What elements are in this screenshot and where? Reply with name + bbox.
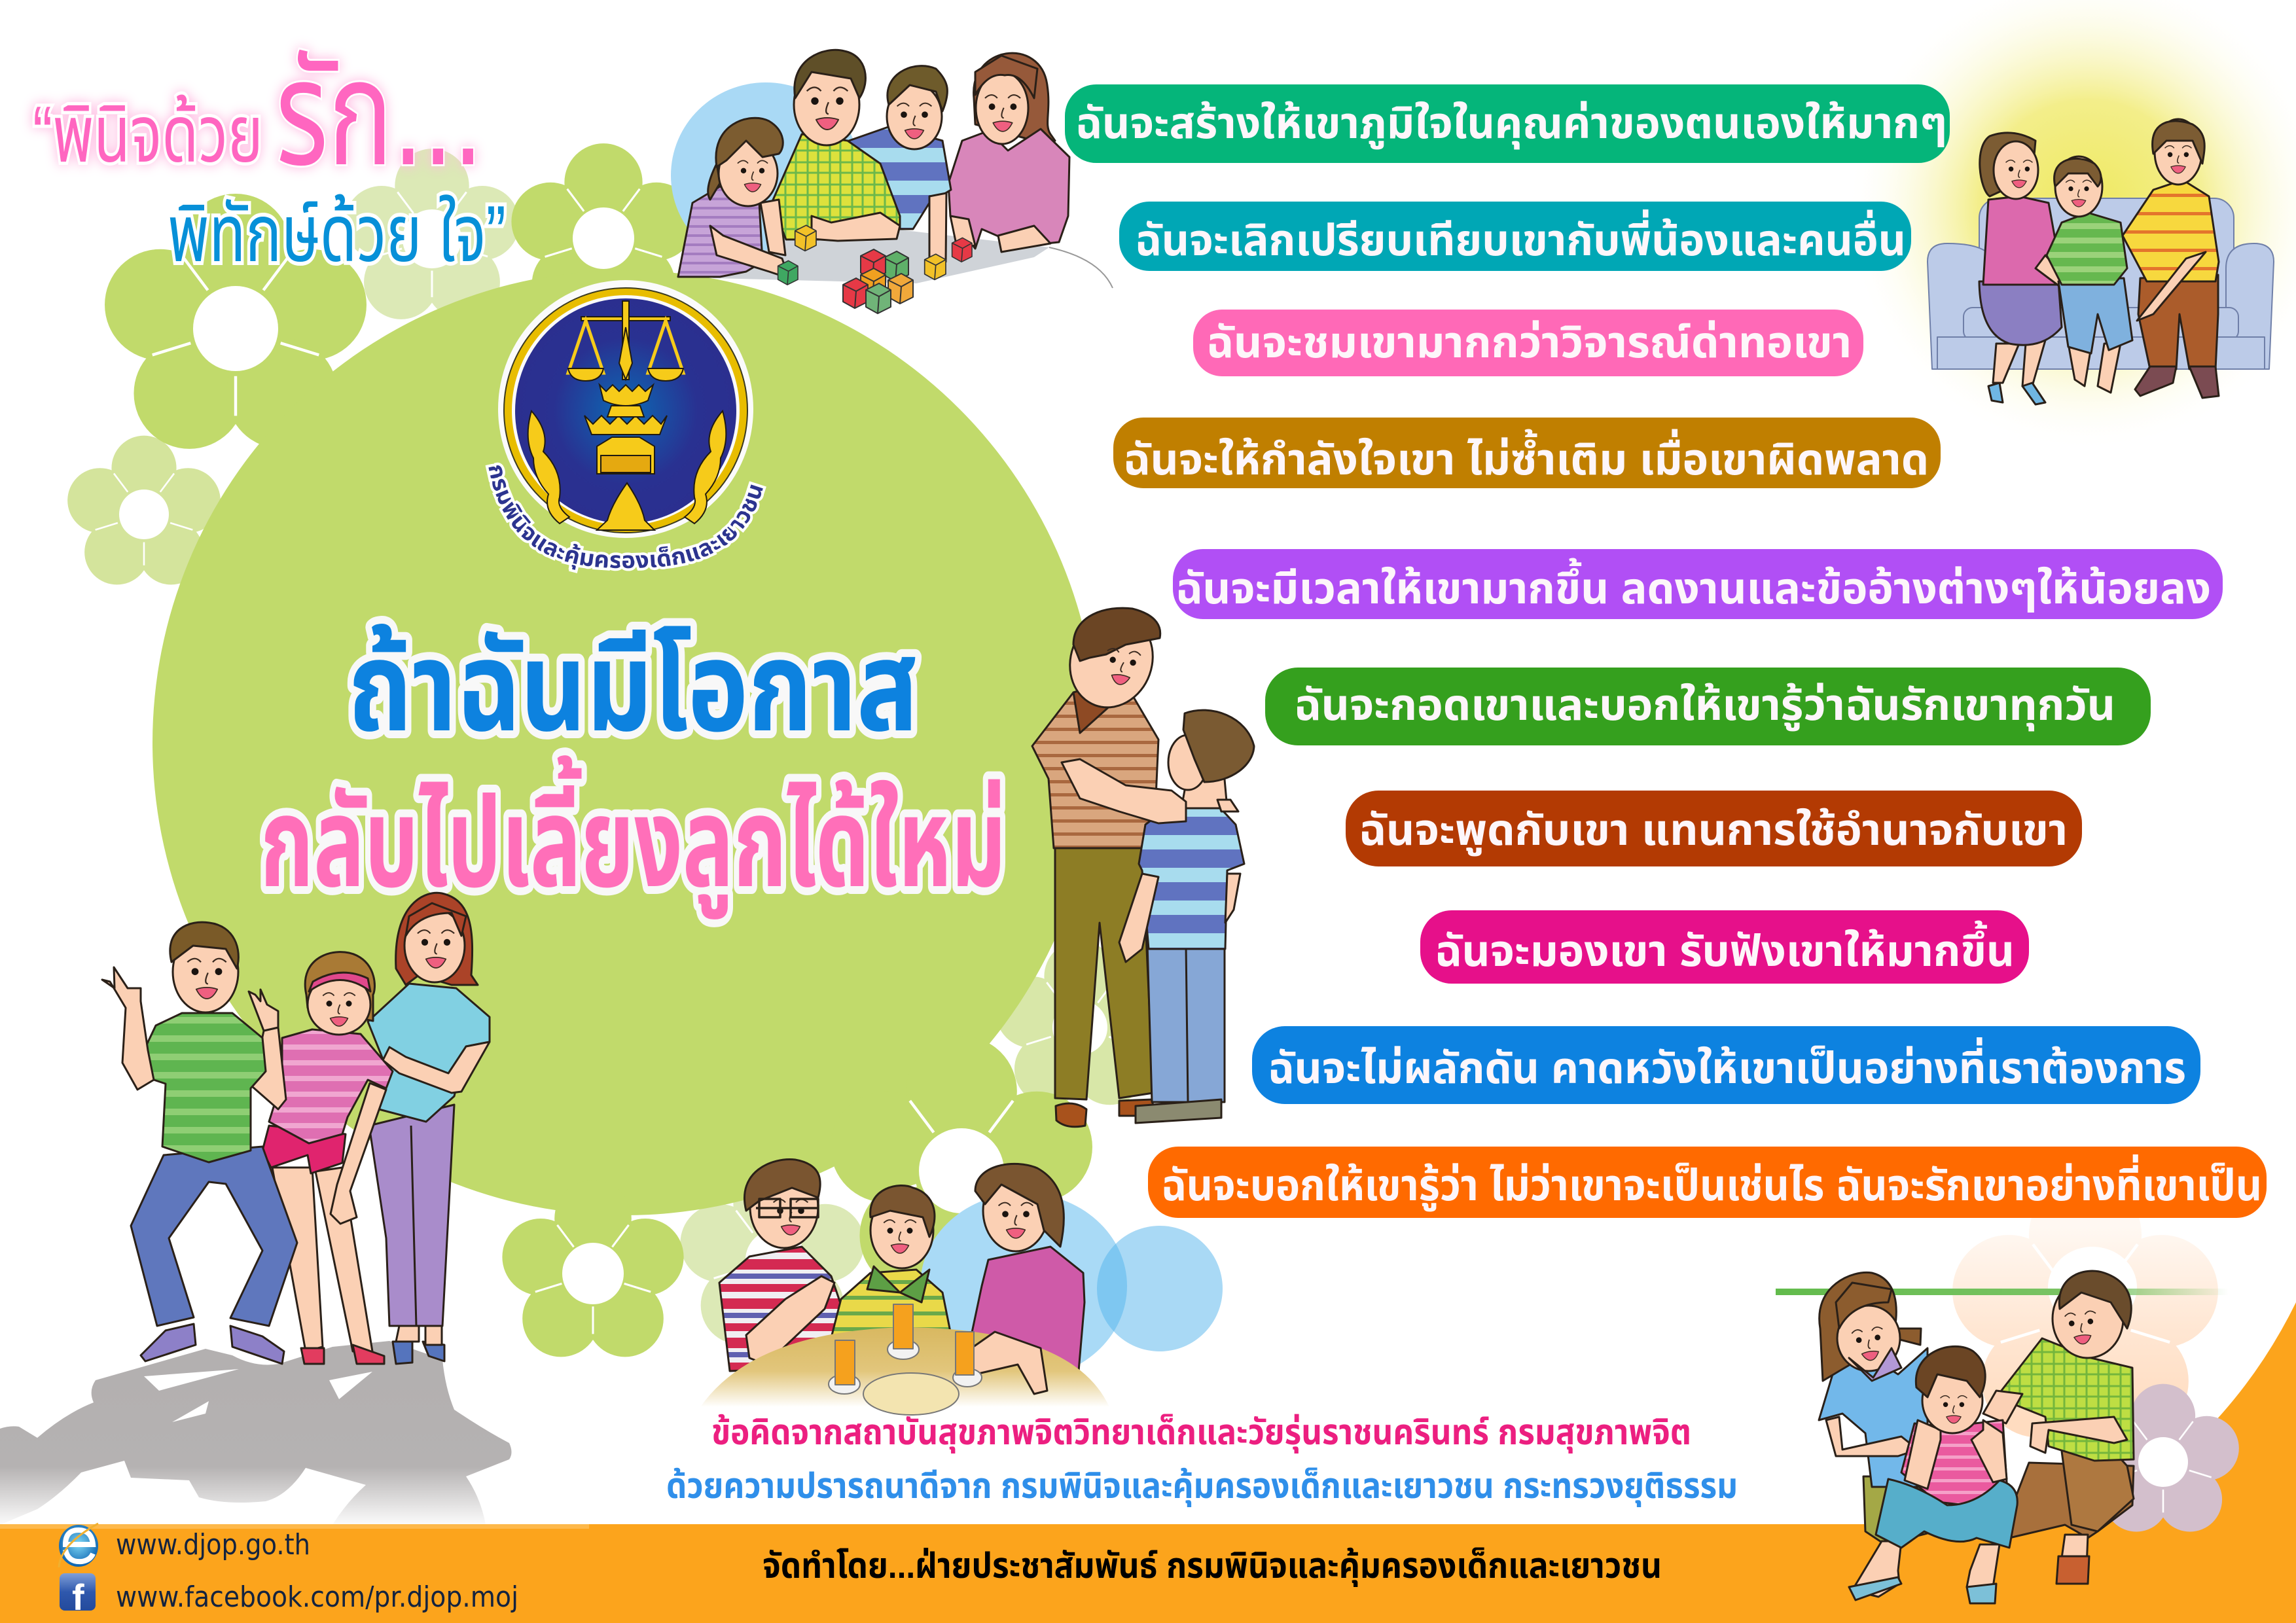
man with glasses xyxy=(719,1160,842,1371)
son xyxy=(1119,710,1254,1123)
pill 9 xyxy=(1252,1026,2200,1104)
pill 7 xyxy=(1346,791,2082,866)
facebook link: www.facebook.com/pr.djop.moj xyxy=(116,1580,518,1614)
illustration: worried child xyxy=(1819,1271,2134,1603)
lilac flower xyxy=(2087,1384,2239,1531)
lotus flame xyxy=(597,483,655,530)
pill 4: ฉันจะให้กำลังใจเขา ไม่ซ้ำเติม เมื่อเขาผิดพลาด xyxy=(1123,429,1929,484)
flower: pale bottom xyxy=(680,1165,865,1344)
flower: bottom xyxy=(502,1180,684,1357)
scales xyxy=(528,301,726,530)
flower: pale behind title xyxy=(344,149,520,319)
shadow of trio xyxy=(0,1341,512,1525)
yellow glow xyxy=(1839,0,2296,458)
icon: browser e xyxy=(59,1524,98,1567)
pill 8: ฉันจะมองเขา รับฟังเขาให้มากขึ้น xyxy=(1435,920,2015,976)
credit: ข้อคิดจากสถาบัน: ข้อคิดจากสถาบันสุขภาพจิตวิทยาเด็กและวัยรุ่นราชนครินทร์ กรมสุขภาพจิต xyxy=(711,1413,1691,1454)
seal caption: กรมพินิจและคุ้มครองเด็กและเยาวชน xyxy=(486,462,766,573)
green line xyxy=(1776,1289,2229,1295)
heading: พินิจด้วยรัก: รัก... xyxy=(276,31,483,196)
naga left xyxy=(528,411,569,524)
woman at table xyxy=(970,1164,1085,1371)
woman xyxy=(368,893,490,1364)
heading: พินิจด้วยรัก: “พินิจด้วย xyxy=(33,90,263,179)
credit: ด้วยความปรารถนาดี: ด้วยความปรารถนาดีจาก กรมพินิจและคุ้มครองเด็กและเยาวชน กระทรวงยุติธรรม xyxy=(666,1467,1738,1507)
sofa xyxy=(1928,198,2274,369)
main title line 2: กลับไปเลี้ยงลูกได้ใหม่ xyxy=(260,755,1006,919)
illustration: father and son xyxy=(1032,603,1254,1127)
naga right xyxy=(685,411,726,524)
pill 2 xyxy=(1119,202,1911,271)
woman on sofa xyxy=(1979,133,2072,404)
footer band xyxy=(0,1524,2296,1623)
boy on sofa xyxy=(2047,156,2132,393)
pill 8 xyxy=(1420,910,2029,984)
orange corner curve xyxy=(2081,1302,2296,1524)
illustration: family at table xyxy=(700,1160,1109,1415)
icon: facebook xyxy=(60,1573,96,1618)
flower: right of bottom xyxy=(831,1036,1092,1291)
pill 6: ฉันจะกอดเขาและบอกให้เขารู้ว่าฉันรักเขาทุกวัน xyxy=(1294,681,2115,732)
pill 4 xyxy=(1113,418,1941,488)
man xyxy=(102,922,297,1364)
boy at table xyxy=(832,1185,951,1335)
pill 5 xyxy=(1173,549,2223,619)
father kneeling xyxy=(1983,1271,2134,1584)
flower: top xyxy=(511,143,696,323)
illustration: family on sofa xyxy=(1928,119,2274,404)
blue circle top xyxy=(671,82,861,268)
man xyxy=(772,50,900,241)
pill 1: ฉันจะสร้างให้เขาภูมิใจในคุณค่าของตนเองให้มากๆ xyxy=(1075,99,1947,150)
pill 3: ฉันจะชมเขามากกว่าวิจารณ์ด่าทอเขา xyxy=(1206,318,1852,367)
large green circle xyxy=(152,270,1098,1215)
father xyxy=(1032,603,1166,1127)
blocks xyxy=(778,225,972,313)
flower: large left xyxy=(105,194,367,449)
heading: พินิจด้วยรัก xyxy=(33,31,483,196)
child xyxy=(1849,1346,2017,1603)
table top xyxy=(713,230,1049,283)
girl xyxy=(249,952,393,1364)
boy xyxy=(849,66,951,262)
pill 1 xyxy=(1065,84,1950,163)
shadow gaps xyxy=(144,1369,372,1422)
illustration: family with blocks xyxy=(678,50,1113,313)
seal rings xyxy=(498,280,753,538)
table xyxy=(700,1327,1109,1407)
pill 7: ฉันจะพูดกับเขา แทนการใช้อำนาจกับเขา xyxy=(1359,806,2068,857)
girl xyxy=(678,118,789,278)
pill 10 xyxy=(1148,1147,2267,1218)
woman crouching xyxy=(1819,1272,1935,1544)
footer credit: จัดทำโดย...ฝ่ายประชาสัมพันธ์ กรมพินิจและคุ้มครองเด็กและเยาวชน xyxy=(762,1546,1662,1587)
pill 2: ฉันจะเลิกเปรียบเทียบเขากับพี่น้องและคนอื่น xyxy=(1135,209,1906,265)
father arm xyxy=(1062,759,1238,823)
icon: facebook: f xyxy=(72,1577,84,1618)
website link: www.djop.go.th xyxy=(116,1528,310,1561)
woman xyxy=(948,53,1069,252)
man on sofa xyxy=(2123,119,2219,398)
flower: pale behind man xyxy=(996,940,1164,1105)
flower: pale left xyxy=(67,436,221,584)
woman's arms xyxy=(962,1332,1047,1394)
pill 5: ฉันจะมีเวลาให้เขามากขึ้น ลดงานและข้ออ้างต่างๆให้น้อยลง xyxy=(1175,558,2211,613)
main title line 1: ถ้าฉันมีโอกาส xyxy=(348,616,918,757)
peach flower xyxy=(1952,1179,2218,1438)
pill 9: ฉันจะไม่ผลักดัน คาดหวังให้เขาเป็นอย่างที่เราต้องการ xyxy=(1268,1037,2186,1093)
blue circles bottom xyxy=(920,1193,1223,1379)
illustration: three friends xyxy=(102,893,490,1364)
pill 6 xyxy=(1265,668,2151,745)
lotus tiers xyxy=(600,385,653,406)
juice glasses and plate xyxy=(829,1304,982,1415)
heading: พิทักษ์ด้วยใจ: พิทักษ์ด้วย ใจ” xyxy=(168,189,506,278)
seal logo xyxy=(486,280,766,573)
